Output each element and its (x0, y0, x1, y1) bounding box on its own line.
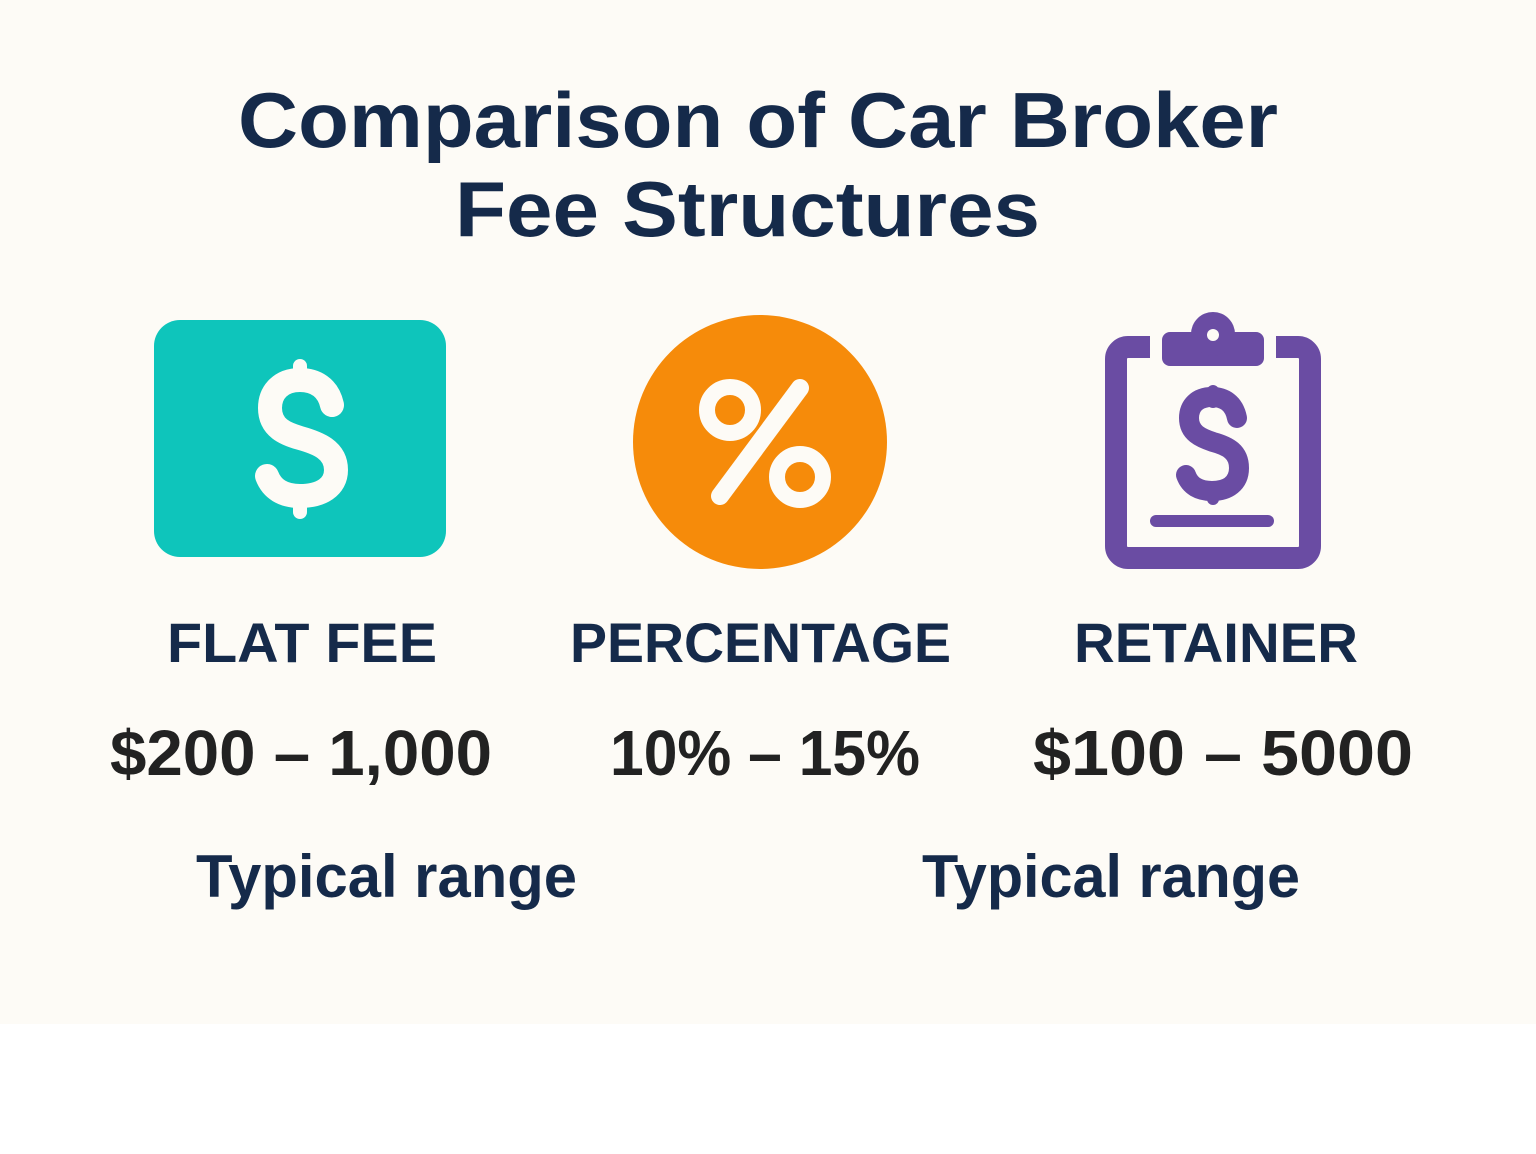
icon: dollar bill (154, 320, 446, 557)
title: Fee Structures (455, 165, 1040, 253)
title: Comparison of Car Broker (238, 76, 1278, 164)
icon: clipboard (1116, 312, 1310, 558)
values: $200 – 1,000 (110, 717, 492, 789)
labels: PERCENTAGE (570, 611, 951, 674)
values: $100 – 5000 (1033, 717, 1413, 789)
icon: percent circle (633, 315, 887, 569)
labels: RETAINER (1074, 611, 1358, 674)
values: 10% – 15% (610, 717, 920, 789)
values (110, 717, 1413, 789)
labels (167, 611, 1358, 674)
captions: Typical range (196, 843, 577, 910)
captions (196, 843, 1300, 910)
captions: Typical range (922, 843, 1300, 910)
labels: FLAT FEE (167, 611, 437, 674)
title (238, 76, 1278, 253)
